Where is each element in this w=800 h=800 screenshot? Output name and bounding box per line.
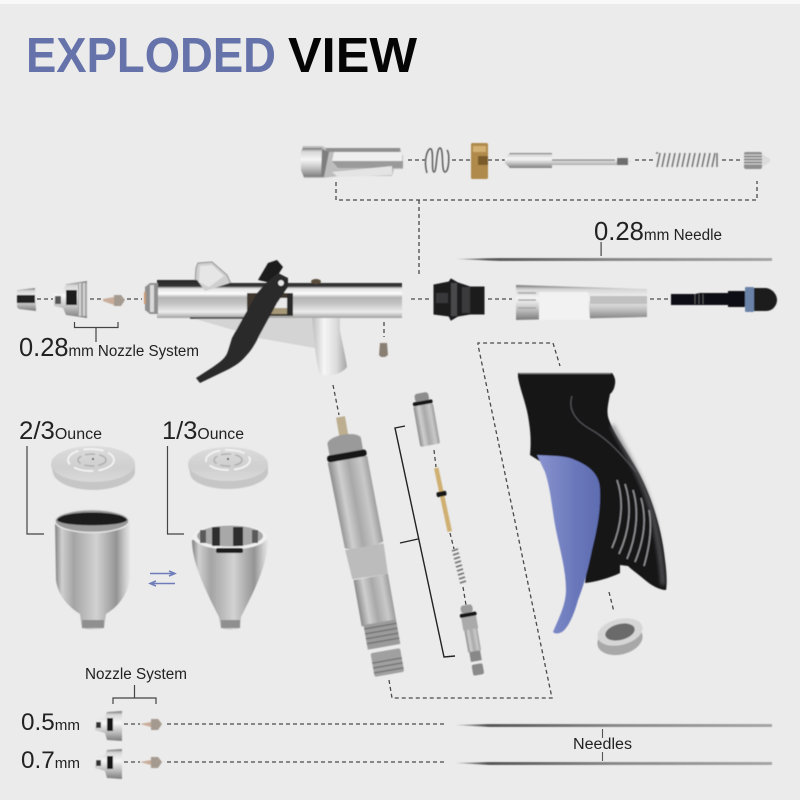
gun: front collar — [144, 283, 158, 314]
label: 2/3 ounce: 2/3Ounce — [19, 417, 102, 445]
part: nozzle cap — [17, 288, 36, 311]
rear barrel parts — [434, 279, 777, 320]
lid: small — [188, 447, 268, 489]
label: needles — [573, 729, 632, 761]
grip: top edge highlight — [519, 372, 611, 374]
nozzle set: 0.5mm — [95, 711, 162, 741]
part: nozzle body — [54, 281, 87, 318]
label: 0.28mm nozzle system: 0.28mm Nozzle System — [19, 332, 199, 362]
label: nozzle system: Nozzle System — [85, 666, 187, 683]
valve internal parts — [411, 391, 487, 676]
internal: brass rod — [431, 467, 454, 533]
airbrush gun body — [144, 260, 402, 383]
internal: small cylinder — [411, 391, 440, 447]
grip: black shell — [518, 373, 667, 590]
knurled nut — [594, 614, 646, 660]
part: black needle chuck — [671, 287, 777, 312]
part: needle guide rod — [505, 153, 633, 168]
swap arrows — [150, 571, 175, 586]
label: nozzle system — [85, 666, 187, 704]
valve: cylinder — [328, 456, 384, 551]
label: 1/3 ounce: 1/3Ounce — [162, 417, 244, 445]
dashed connectors — [37, 160, 757, 762]
valve: collar — [326, 432, 363, 457]
part: long spring — [656, 153, 717, 167]
valve: pin — [336, 416, 349, 440]
gun: pistol handle — [312, 318, 347, 376]
bracket: valve internals — [395, 426, 455, 657]
gun: underside shadow — [190, 317, 245, 319]
label: 0.5mm: 0.5mm — [21, 709, 80, 736]
label: 0.7mm: 0.7mm — [21, 747, 80, 774]
gun: cup socket — [195, 262, 231, 292]
grip: contour line — [571, 396, 636, 472]
gun: air hole — [311, 279, 321, 284]
grip: blue trigger — [537, 455, 600, 634]
internal: spring — [452, 549, 466, 583]
label: 1/3 ounce — [162, 417, 244, 534]
label: 0.28mm needle: 0.28mm Needle — [594, 216, 722, 246]
cup: large — [55, 510, 130, 630]
cups and lids — [51, 446, 268, 630]
valve: lower threaded end — [370, 648, 404, 677]
grip: ribbed texture — [612, 480, 650, 566]
title: VIEW — [288, 29, 418, 83]
part: nozzle tip — [103, 295, 125, 306]
needle: 0.7mm — [455, 762, 772, 765]
needle: 0.5mm — [455, 724, 772, 727]
gun: trigger back roller — [258, 260, 283, 282]
title: EXPLODED — [26, 29, 276, 83]
top assembly parts — [301, 143, 770, 179]
valve: threads — [363, 619, 400, 650]
part: chrome sleeve — [516, 285, 647, 320]
valve: shaft — [354, 574, 396, 626]
needle: 0.28mm — [455, 258, 772, 261]
part: small screw — [379, 343, 388, 357]
lid: large — [51, 446, 135, 490]
valve assembly — [320, 413, 406, 678]
valve: o-ring — [327, 449, 367, 463]
part: brass nut — [471, 143, 488, 179]
gun: trigger window — [247, 293, 293, 316]
part: black coupler — [434, 279, 484, 320]
cup: small — [192, 524, 268, 630]
gun: lower wedge — [192, 318, 340, 350]
label: needles: Needles — [573, 736, 632, 753]
title — [26, 29, 418, 83]
gun: main barrel — [157, 280, 402, 318]
grip: side sheen — [612, 425, 663, 585]
front nozzle parts — [17, 281, 125, 318]
gun: trigger lever — [196, 273, 288, 383]
label: 2/3 ounce — [19, 417, 102, 534]
part: end screw — [744, 152, 770, 169]
valve: hex nut — [345, 543, 389, 581]
gun: pivot pin — [278, 280, 284, 286]
pistol grip — [518, 373, 667, 634]
gun: cup socket highlight — [199, 265, 224, 287]
part: coil spring — [426, 148, 449, 173]
part: needle chucking housing — [301, 146, 403, 178]
nozzle set: 0.7mm — [95, 749, 162, 779]
internal: lower valve — [458, 603, 487, 676]
